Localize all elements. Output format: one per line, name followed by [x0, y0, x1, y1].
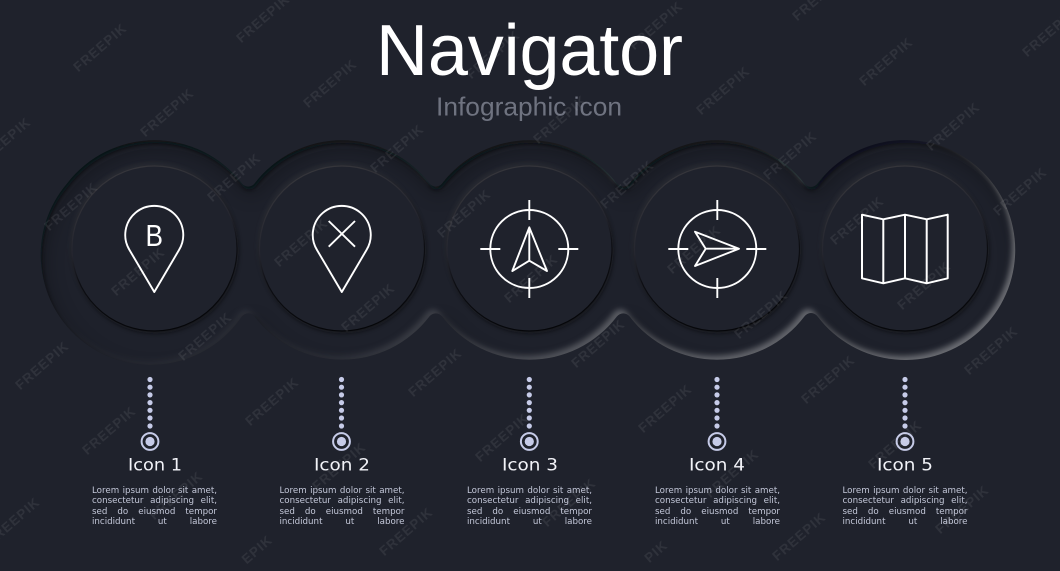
watermark pattern: FREEPIK [990, 164, 1050, 219]
watermark pattern: FREEPIK [760, 128, 820, 183]
text block 1: Lorem ipsum dolor sit amet, [92, 486, 217, 496]
text block 1: consectetur adipiscing elit, [92, 496, 217, 506]
connector 4: dotted line and target marker [709, 377, 725, 450]
text block 4: Lorem ipsum dolor sit amet, [655, 486, 780, 496]
connector 3: dotted line and target marker [521, 377, 538, 450]
heading: Icon 2: Icon 2 [314, 456, 370, 476]
watermark pattern: FREEPIK [175, 309, 235, 364]
panel: recessed neumorphic well with five circles [40, 140, 1016, 360]
watermark pattern: FREEPIK [70, 20, 130, 75]
text block 3: incididunt ut labore [467, 517, 592, 527]
watermark pattern: FREEPIK [204, 150, 264, 205]
icon: compass pointing right [668, 200, 766, 298]
watermark pattern: FREEPIK [79, 403, 139, 458]
watermark pattern: FREEPIK [242, 374, 302, 429]
watermark pattern: FREEPIK [530, 92, 590, 147]
subtitle: Infographic icon [436, 92, 622, 122]
text block 3 [467, 486, 592, 527]
text block 1: sed do eiusmod tempor [92, 507, 217, 517]
watermark pattern: FREEPIK [146, 468, 206, 523]
watermark pattern: FREEPIK [12, 338, 72, 393]
watermark pattern: FREEPIK [338, 280, 398, 335]
text block 2: Lorem ipsum dolor sit amet, [280, 486, 404, 496]
icon: location pin B: B [146, 218, 163, 253]
title: Navigator [376, 11, 683, 91]
watermark pattern: FREEPIK [635, 381, 695, 436]
text block 5 [842, 486, 968, 527]
watermark pattern: FREEPIK [702, 446, 762, 501]
text block 2: sed do eiusmod tempor [280, 507, 404, 517]
watermark pattern: FREEPIK [827, 193, 887, 248]
watermark pattern: FREEPIK [501, 251, 561, 306]
watermark pattern: FREEPIK [309, 439, 369, 494]
text block 5: incididunt ut labore [842, 517, 968, 527]
connector 2: dotted line and target marker [333, 377, 350, 450]
text block 5: consectetur adipiscing elit, [842, 496, 968, 506]
watermark pattern: FREEPIK [731, 287, 791, 342]
text block 4: incididunt ut labore [655, 517, 780, 527]
watermark pattern: FREEPIK [376, 504, 436, 559]
watermark pattern: FREEPIK [137, 85, 197, 140]
text block 1: incididunt ut labore [92, 517, 217, 527]
connector 1: dotted line and target marker [142, 377, 158, 450]
watermark pattern: FREEPIK [367, 121, 427, 176]
watermark pattern: FREEPIK [894, 258, 954, 313]
watermark pattern: FREEPIK [664, 222, 724, 277]
watermark pattern: EPIK [239, 532, 275, 567]
text block 3: Lorem ipsum dolor sit amet, [467, 486, 592, 496]
icon: location pin with cross [313, 206, 371, 292]
heading: Icon 1: Icon 1 [128, 456, 182, 476]
heading: Icon 5: Icon 5 [877, 456, 933, 476]
text block 2 [280, 486, 404, 527]
watermark pattern: FREEPIK [693, 63, 753, 118]
watermark pattern: FREEPIK [961, 323, 1021, 378]
watermark pattern: FREEPIK [300, 56, 360, 111]
text block 1 [92, 486, 217, 527]
text block 4: consectetur adipiscing elit, [655, 496, 780, 506]
watermark pattern: FREEPIK [865, 417, 925, 472]
text block 5: Lorem ipsum dolor sit amet, [842, 486, 968, 496]
watermark pattern: FREEPIK [769, 509, 829, 564]
watermark pattern: FREEPIK [539, 475, 599, 530]
text block 5: sed do eiusmod tempor [842, 507, 968, 517]
watermark pattern: FREEPIK [463, 27, 523, 82]
watermark pattern: FREEPIK [626, 0, 686, 53]
text block 2: consectetur adipiscing elit, [280, 496, 404, 506]
watermark pattern: FREEPIK [472, 410, 532, 465]
icon: compass pointing up [480, 200, 578, 298]
watermark pattern: FREEPIK [405, 345, 465, 400]
text block 3: consectetur adipiscing elit, [467, 496, 592, 506]
watermark pattern: FREEPIK [798, 352, 858, 407]
text block 4 [655, 486, 780, 527]
text block 4: sed do eiusmod tempor [655, 507, 780, 517]
watermark pattern: FREEPIK [923, 99, 983, 154]
connector 5: dotted line and target marker [897, 377, 913, 450]
watermark pattern: FREEPIK [932, 482, 992, 537]
icon: folded map [862, 215, 948, 283]
text block 3: sed do eiusmod tempor [467, 507, 592, 517]
watermark pattern: FREEPIK [568, 316, 628, 371]
text block 2: incididunt ut labore [280, 517, 404, 527]
watermark pattern: FREEPIK [434, 186, 494, 241]
icon: location pin B [125, 206, 183, 292]
watermark pattern: FREEPIK [108, 244, 168, 299]
watermark pattern: PIK [641, 538, 671, 566]
heading: Icon 3: Icon 3 [502, 456, 558, 476]
watermark pattern: FREEPIK [856, 34, 916, 89]
watermark pattern: FREEPIK [271, 215, 331, 270]
watermark pattern: FREEPIK [597, 157, 657, 212]
heading: Icon 4: Icon 4 [689, 456, 745, 476]
watermark pattern: FREEPIK [41, 179, 101, 234]
